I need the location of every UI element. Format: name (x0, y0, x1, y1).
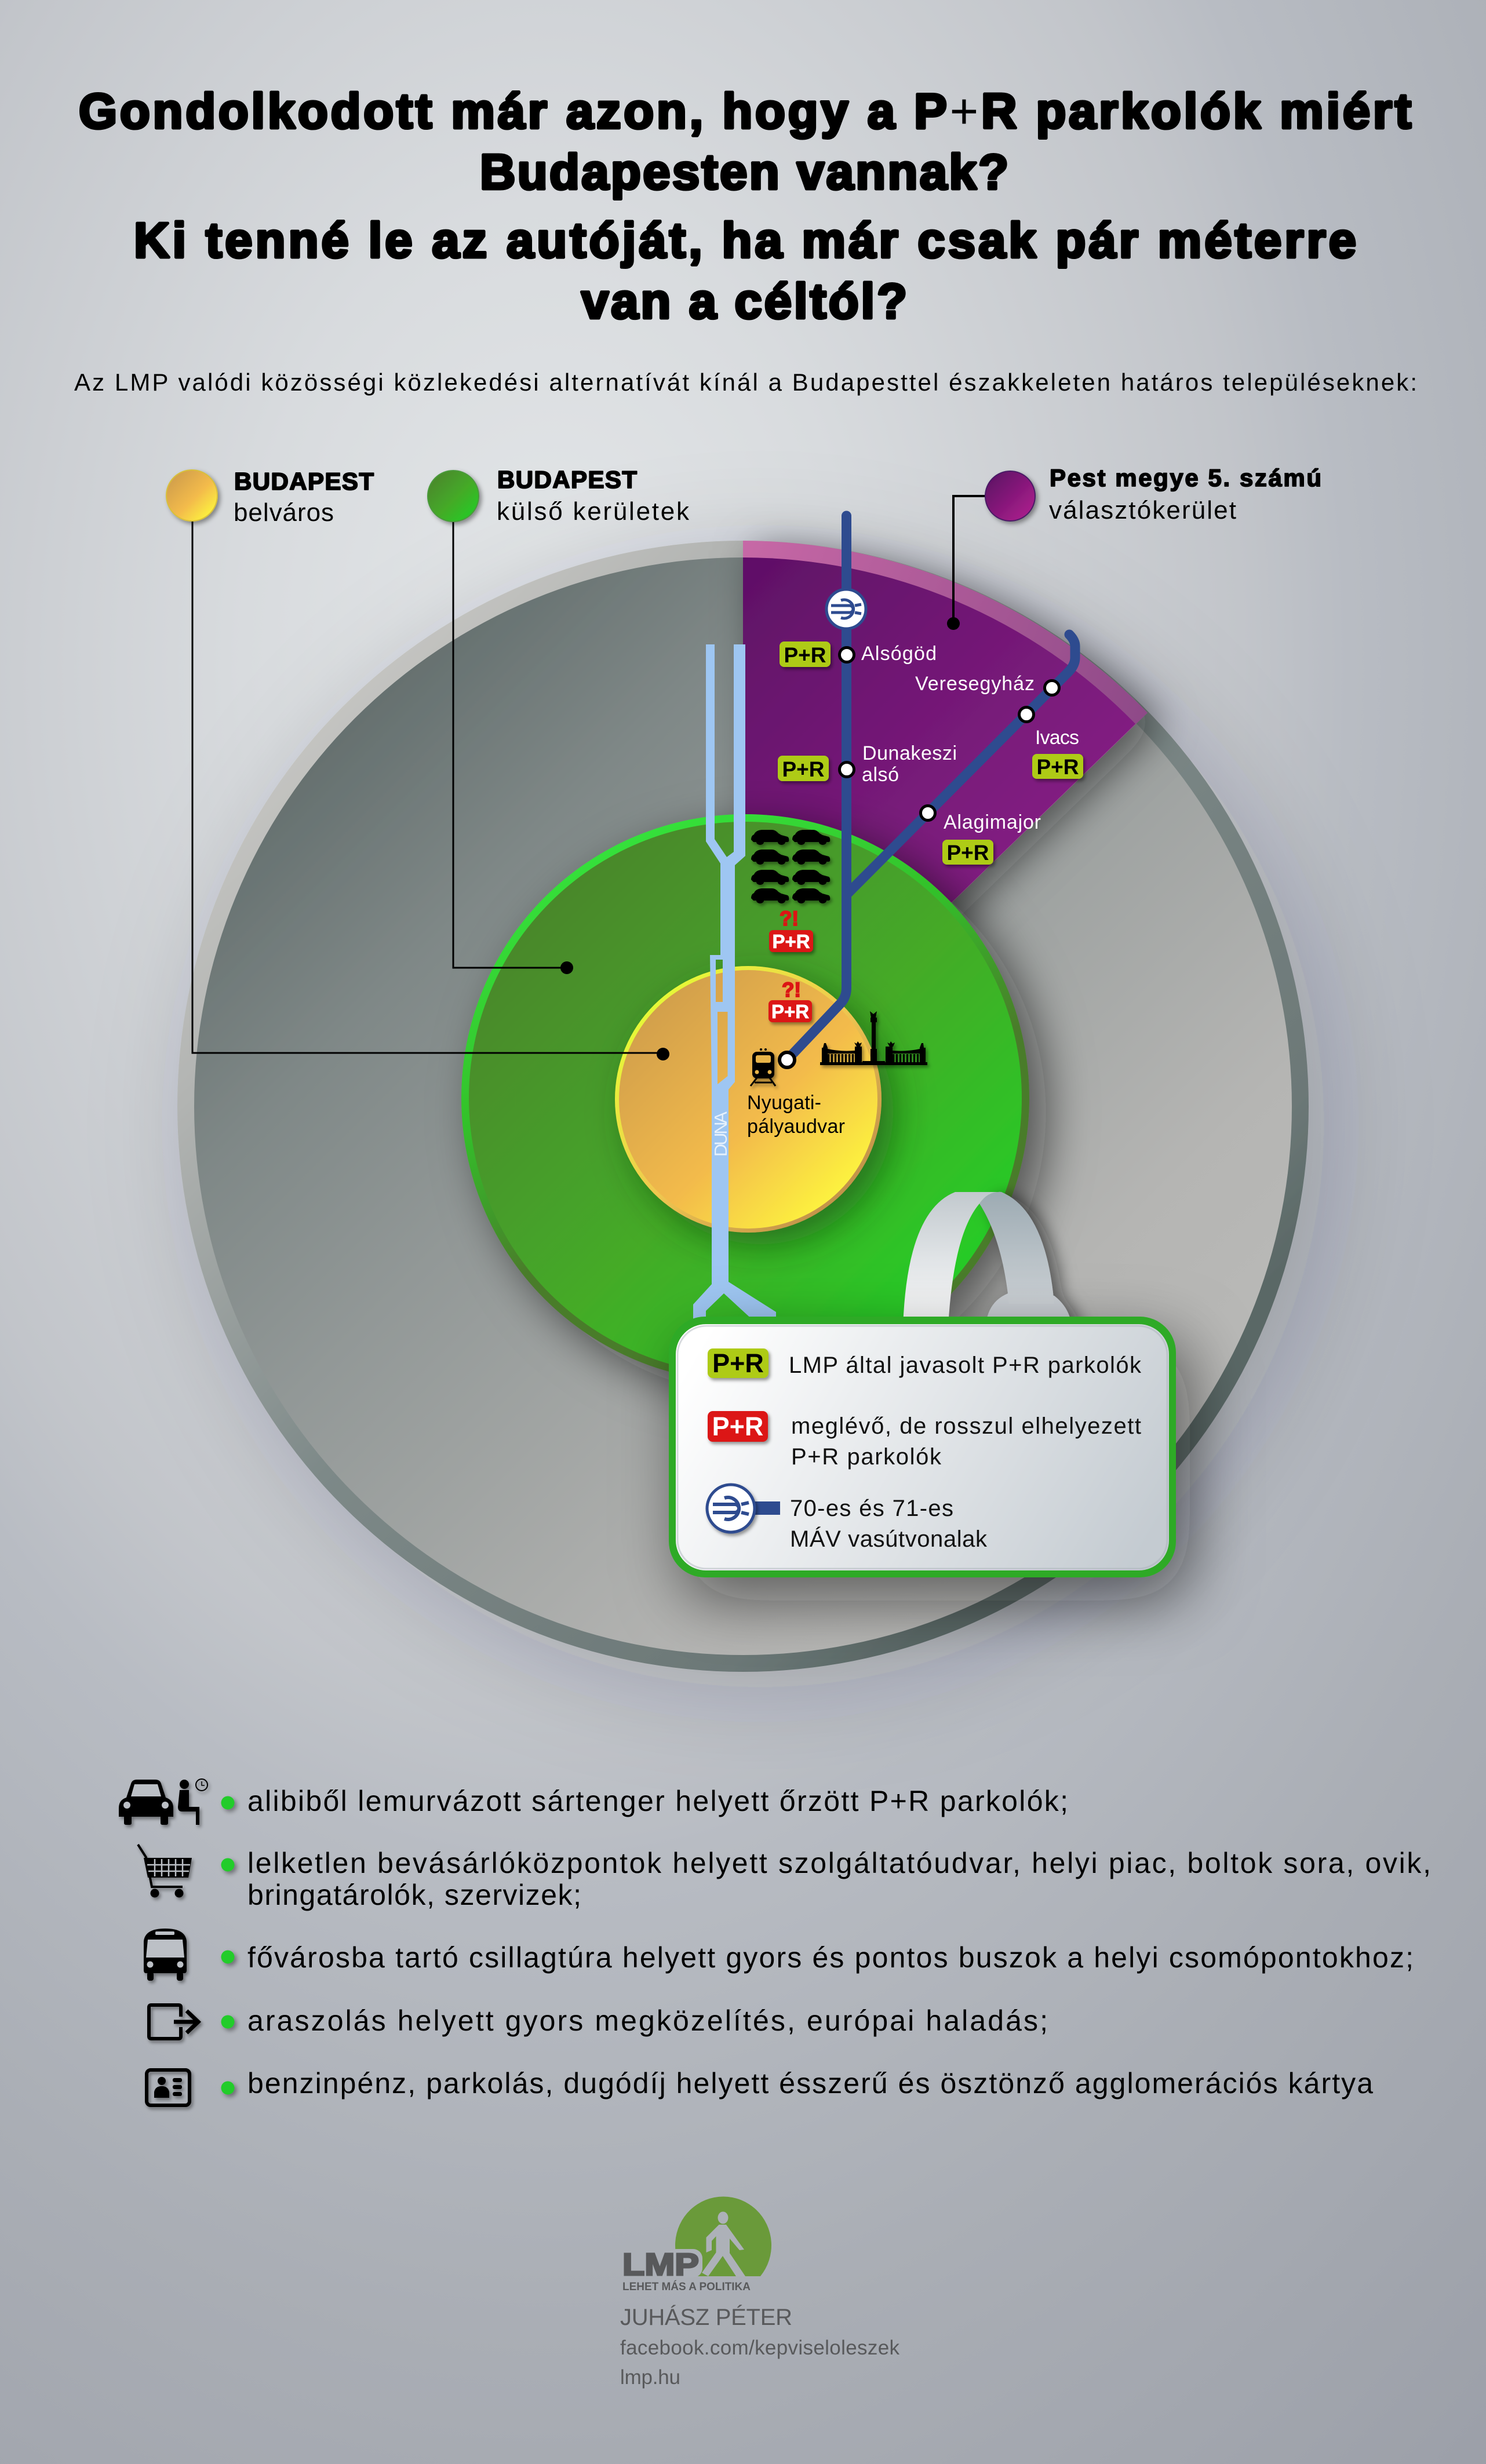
legend row: railway (707, 1485, 988, 1552)
legend: Budapest külső kerületek: BUDAPEST (497, 466, 637, 493)
existing P+R markers on map (769, 907, 813, 1022)
railway lines (787, 516, 1075, 1060)
existing P+R markers on map: P+R (772, 931, 810, 952)
hanger strap (903, 1192, 1072, 1333)
station labels: Dunakeszi (862, 742, 957, 764)
leader line (453, 522, 567, 968)
label: DUNA: DUNA (711, 1111, 731, 1157)
colour dot (985, 471, 1035, 521)
title: van a céltól? (581, 274, 907, 329)
title: Budapesten vannak? (480, 145, 1008, 200)
station labels: Alsógöd (861, 643, 937, 665)
proposed P+R badges: P+R (1036, 755, 1079, 779)
icon: train (751, 1048, 775, 1086)
footer contact: lmp.hu (620, 2366, 680, 2389)
leader line (953, 496, 986, 624)
icon: bus (144, 1929, 187, 1981)
bullet text 3: fővárosba tartó csillagtúra helyett gyors és pontos buszok a helyi csomópontokhoz; (247, 1941, 1414, 1974)
legend row: proposed P+R: LMP által javasolt P+R parkolók (789, 1353, 1142, 1378)
label: Nyugati station: pályaudvar (747, 1116, 845, 1138)
walking figure (702, 2211, 745, 2276)
proposed P+R badges: P+R (782, 757, 825, 781)
map: concentric zones (177, 541, 1309, 1672)
existing P+R markers on map: ?! (782, 979, 801, 1001)
bullet text 2: lelketlen bevásárlóközpontok helyett szolgáltatóudvar, helyi piac, boltok sora, ovik, (247, 1847, 1431, 1879)
station labels: Ivacs (1035, 727, 1079, 749)
icon: Heroes' Square (820, 1011, 927, 1065)
proposed P+R badges: P+R (946, 841, 989, 865)
existing P+R markers on map: ?! (780, 907, 799, 930)
legend: Budapest külső kerületek (428, 466, 690, 974)
zone: Pest county sector (743, 541, 1148, 1105)
bullet text 5: benzinpénz, parkolás, dugódíj helyett ésszerű és ösztönző agglomerációs kártya (247, 2067, 1373, 2099)
bullet text 2 (247, 1847, 1431, 1911)
zone: inner city (615, 966, 882, 1233)
zone: outer districts (461, 814, 1029, 1382)
icon: MÁV logo on map (826, 589, 866, 629)
legend: Budapest belváros: BUDAPEST (234, 468, 374, 495)
station labels: Veresegyház (915, 673, 1035, 695)
stations (780, 648, 1059, 1067)
legend row: railway: 70-es és 71-es (790, 1496, 953, 1521)
legend row: existing P+R: P+R (712, 1412, 763, 1441)
station labels (861, 643, 1079, 833)
logo: LMP (622, 2197, 771, 2293)
leader line (192, 521, 663, 1053)
footer contact: JUHÁSZ PÉTER (620, 2304, 792, 2330)
river Danube (693, 644, 776, 1327)
legend: Budapest belváros (166, 468, 669, 1060)
legend row: railway: MÁV vasútvonalak (790, 1526, 988, 1552)
footer contact (620, 2304, 899, 2389)
proposed P+R badges: P+R (784, 643, 826, 667)
logo: LMP: LEHET MÁS A POLITIKA (622, 2280, 751, 2293)
icon: exit arrow (149, 2005, 198, 2039)
bullet text 2: bringatárolók, szervizek; (247, 1879, 581, 1911)
station labels: Alagimajor (944, 811, 1041, 833)
title: Ki tenné le az autóját, ha már csak pár méterre (134, 213, 1356, 268)
legend: Pest megye 5.: választókerület (1049, 496, 1236, 524)
footer contact: facebook.com/kepviseloleszek (620, 2337, 899, 2359)
legend: Budapest belváros: belváros (234, 498, 334, 527)
colour dot (166, 470, 217, 521)
legend: Pest megye 5.: Pest megye 5. számú (1050, 464, 1321, 491)
icon: shopping cart (138, 1845, 192, 1897)
legend: Pest megye 5. (947, 464, 1321, 630)
icon: car and waiting person (119, 1779, 207, 1825)
zone: outer disc (177, 541, 1309, 1672)
legend box (669, 1317, 1176, 1577)
bullet text 1: alibiből lemurvázott sártenger helyett őrzött P+R parkolók; (247, 1785, 1068, 1817)
subtitle: Az LMP valódi közösségi közlekedési alternatívát kínál a Budapesttel északkeleten határos településeknek: (74, 369, 1417, 396)
title (79, 84, 1411, 329)
legend row: existing P+R: P+R parkolók (791, 1444, 942, 1470)
legend row: existing P+R (708, 1411, 1141, 1470)
existing P+R markers on map: P+R (771, 1001, 809, 1022)
bullet text 4: araszolás helyett gyors megközelítés, európai haladás; (247, 2004, 1048, 2037)
benefit bullets (221, 1785, 1431, 2099)
legend row: proposed P+R: P+R (712, 1348, 764, 1378)
colour dot (428, 471, 479, 522)
label: Nyugati station (747, 1092, 845, 1138)
logo: LMP: LMP (622, 2247, 699, 2282)
proposed P+R badges (778, 641, 1083, 865)
icon: ID card (147, 2070, 190, 2105)
station labels: alsó (862, 764, 899, 786)
label: Nyugati station: Nyugati- (747, 1092, 821, 1114)
icon: parked cars (751, 830, 830, 903)
legend row: existing P+R: meglévő, de rosszul elhelyezett (791, 1413, 1141, 1439)
title: Gondolkodott már azon, hogy a P+R parkolók miért (79, 84, 1411, 139)
legend: Budapest külső kerületek: külső kerületek (497, 497, 690, 526)
